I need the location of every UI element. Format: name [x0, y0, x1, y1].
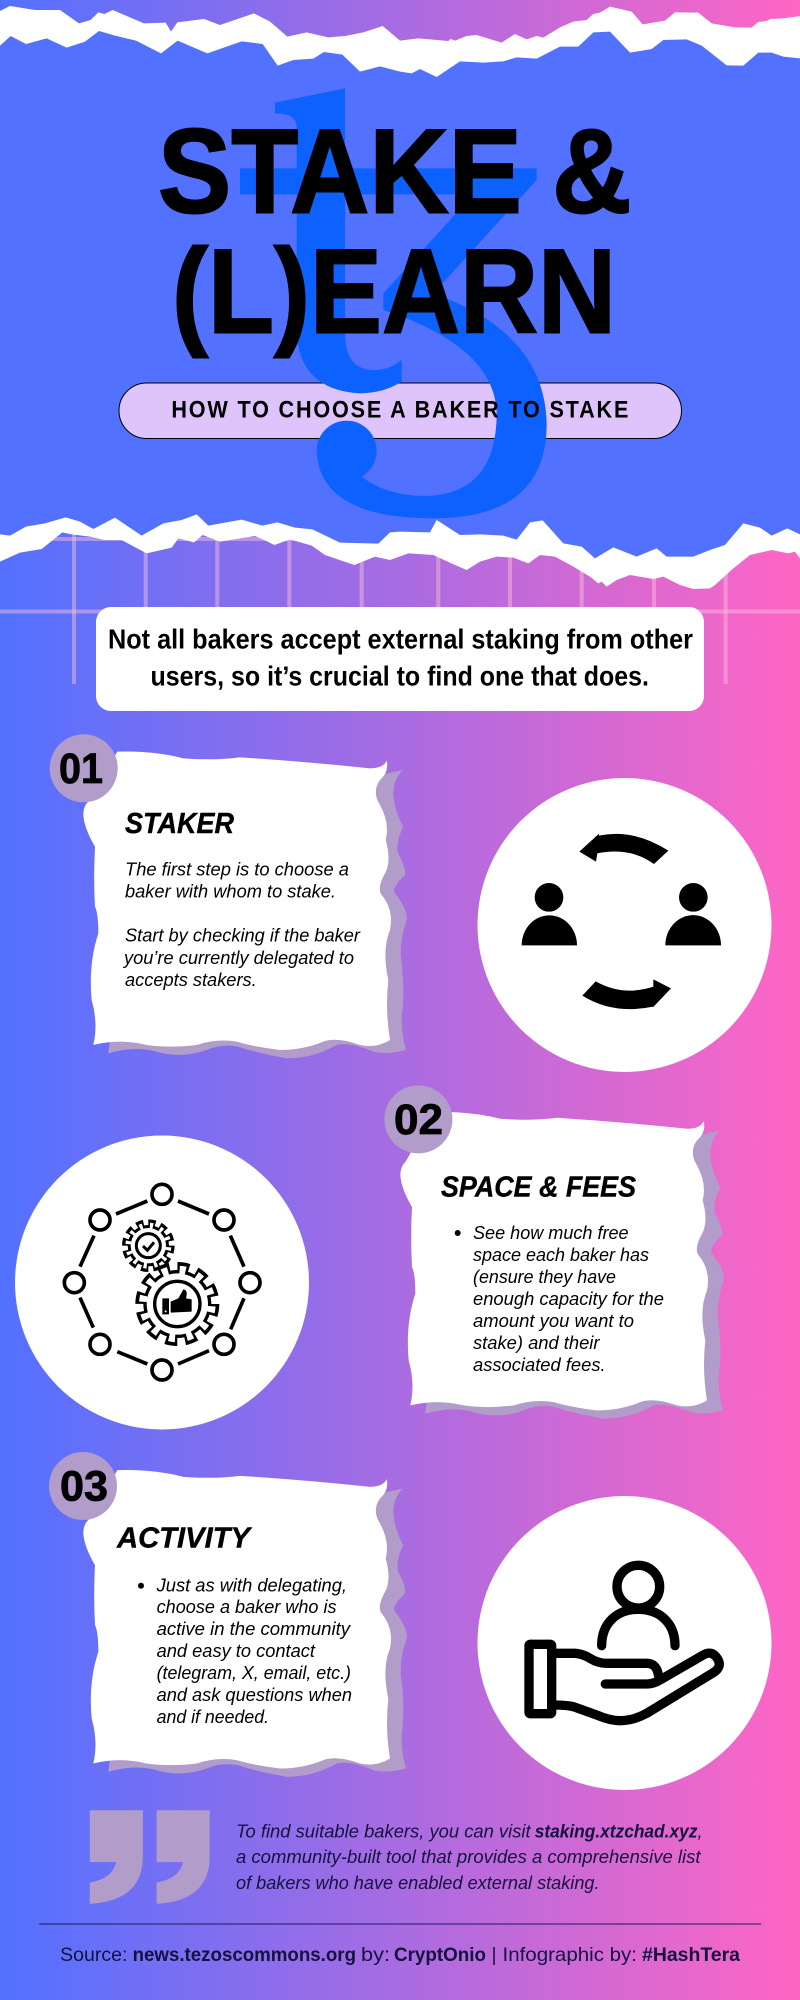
- text: space and fees body: stake) and their: [473, 1332, 600, 1353]
- subtitle pill: [119, 383, 682, 438]
- text: activity body: [138, 1574, 352, 1727]
- icon: quotation marks: [90, 1810, 210, 1904]
- text: quote: of bakers who have enabled external staking.: [236, 1872, 600, 1893]
- subtitle: HOW TO CHOOSE A BAKER TO STAKE: [171, 395, 628, 423]
- text: space and fees body: See how much free: [473, 1222, 629, 1243]
- text: space and fees body: associated fees.: [473, 1354, 606, 1375]
- text: activity body: and easy to contact: [157, 1640, 316, 1661]
- text: space and fees body: (ensure they have: [473, 1266, 616, 1287]
- title: (L)EARN: [172, 224, 616, 358]
- text: quote: [236, 1820, 703, 1893]
- step number 02: 02: [394, 1096, 443, 1144]
- panel: step 3 activity: [49, 1452, 407, 1777]
- panel: step 1 staker: [50, 734, 407, 1058]
- heading: activity: ACTIVITY: [116, 1522, 253, 1554]
- panel: step 2 space and fees: [384, 1085, 724, 1419]
- text: activity body: (telegram, X, email, etc.): [157, 1662, 351, 1683]
- text: quote: To find suitable bakers, you can visit: [236, 1820, 531, 1841]
- text: space and fees body: amount you want to: [473, 1310, 634, 1331]
- text: staker body: accepts stakers.: [125, 969, 257, 990]
- icon: gears network: [15, 1136, 309, 1430]
- text: staker body: [122, 859, 361, 990]
- text: staker body: baker with whom to stake.: [125, 881, 336, 902]
- text: quote: a community-built tool that provides a comprehensive list: [236, 1846, 701, 1867]
- text: quote: staking.xtzchad.xyz: [535, 1820, 698, 1841]
- source credits: by:: [361, 1944, 390, 1966]
- source credits: Infographic by:: [502, 1944, 637, 1966]
- text: activity body: and if needed.: [157, 1706, 269, 1727]
- header band: [0, 0, 800, 589]
- icon: tezos logo: [240, 88, 547, 518]
- text: quote: ,: [698, 1820, 703, 1841]
- text: space and fees body: enough capacity for the: [473, 1288, 664, 1309]
- text: activity body: and ask questions when: [157, 1684, 352, 1705]
- text: space and fees body: [455, 1222, 664, 1375]
- text: activity body: Just as with delegating,: [156, 1574, 347, 1595]
- intro callout: [96, 607, 704, 711]
- intro callout: users, so it’s crucial to find one that does.: [150, 660, 649, 692]
- step number 01: 01: [59, 745, 103, 793]
- title: STAKE &: [158, 104, 632, 238]
- intro callout: Not all bakers accept external staking from other: [108, 624, 693, 654]
- source credits: CryptOnio: [394, 1944, 486, 1966]
- text: staker body: Start by checking if the baker: [125, 925, 361, 946]
- source credits: [60, 1944, 740, 1966]
- step number 03: 03: [60, 1462, 108, 1510]
- source credits: #HashTera: [642, 1944, 740, 1966]
- title: [158, 104, 632, 358]
- text: activity body: active in the community: [157, 1618, 352, 1639]
- icon: people exchange: [478, 778, 772, 1072]
- heading: space and fees: SPACE & FEES: [441, 1172, 637, 1204]
- text: staker body: The first step is to choose a: [125, 859, 349, 880]
- text: space and fees body: space each baker has: [473, 1244, 649, 1265]
- source credits: Source:: [60, 1944, 128, 1966]
- text: activity body: choose a baker who is: [157, 1596, 337, 1617]
- source credits: |: [492, 1944, 497, 1966]
- text: staker body: you’re currently delegated to: [122, 947, 354, 968]
- icon: hand holding person: [478, 1496, 772, 1790]
- heading: staker: STAKER: [125, 808, 234, 840]
- source credits: news.tezoscommons.org: [133, 1944, 356, 1966]
